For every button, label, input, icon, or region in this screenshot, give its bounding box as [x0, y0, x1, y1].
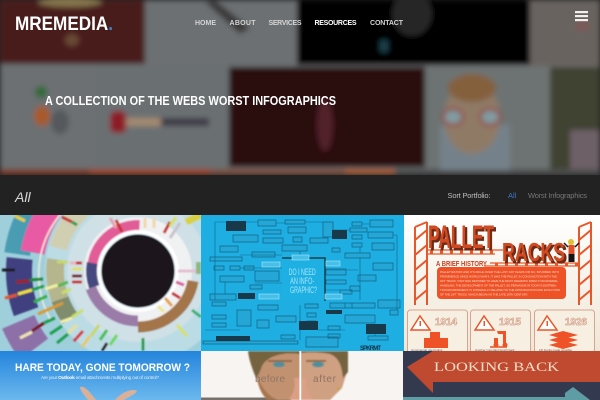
navigation menu — [195, 20, 404, 27]
card: 1914: Commercial use begins — [411, 348, 443, 352]
tile: pallet racks — [402, 215, 600, 352]
history text box: PROMINENCE SINCE WORLD WAR II. IT WAS THE PALLET, IN CONJUNCTION WITH THE — [440, 274, 557, 278]
tile: before and after face — [201, 351, 403, 400]
label boxes around centre — [259, 255, 342, 299]
history text box: HANDLING. THE DEVELOPMENT OF THE PALLET, SO PERVASIVE IN TODAY'S DISTRIBU- — [440, 284, 557, 288]
history text box — [437, 267, 566, 299]
title shadow: pallet: PALLET — [430, 221, 496, 257]
central question box: GRAPHIC? — [290, 285, 317, 296]
title: racks: RACKS — [502, 237, 565, 267]
filter bar — [0, 175, 600, 215]
radial tick marks — [2, 215, 201, 351]
card: 1914 — [408, 310, 468, 352]
subtitle: A BRIEF HISTORY — [436, 261, 487, 268]
rack platforms — [427, 250, 579, 266]
logo: MREMEDIA. — [15, 13, 113, 35]
history text box: PALLETIZATION AND ITS ROLE OVER THE LAST 100 YEARS OR SO, SPURRED INTO — [440, 270, 560, 274]
left rack — [415, 222, 427, 305]
history text box: OF THE LIFT TRUCK, WHICH BEGAN IN THE LATE 19TH CENTURY. — [440, 292, 528, 296]
central question box — [282, 258, 325, 301]
card: 1915: Another important benchmark — [475, 348, 515, 352]
divider — [300, 351, 301, 400]
tile: circular data wheel — [0, 215, 201, 351]
hare headline: HARE TODAY, GONE TOMORROW ? — [15, 362, 190, 374]
icon: rabbit ears — [80, 387, 137, 400]
history text box: TION ENVIRONMENT, IS INTEGRALLY RELATED TO THE INTRODUCTION AND EVOLUTION — [440, 288, 560, 292]
teal arrow — [403, 387, 590, 400]
title: pallet: PALLET — [428, 219, 494, 255]
tile: looking back — [403, 351, 600, 400]
card: 1915: 1915 — [499, 317, 521, 328]
central question box: AN INFO- — [290, 276, 314, 287]
red arrow — [407, 351, 600, 393]
flowchart connector lines — [205, 222, 397, 340]
nav: services: SERVICES — [268, 20, 302, 27]
nav: resources: RESOURCES — [314, 20, 357, 27]
card: 1926: 1926 — [565, 317, 587, 328]
icon: hamburger menu — [575, 11, 588, 21]
nav: about: ABOUT — [230, 20, 256, 27]
nav: home: HOME — [195, 20, 216, 27]
card: 1914: 1914 — [435, 317, 457, 328]
inner rings — [76, 209, 200, 333]
card: 1926 — [534, 310, 594, 352]
sort option: worst infographics: Worst Infographics — [528, 191, 587, 200]
label: before: before — [255, 374, 285, 385]
flowchart boxes — [203, 220, 400, 347]
portrait: after side — [301, 351, 348, 400]
caption strip — [201, 398, 291, 400]
label: after: after — [313, 374, 337, 385]
portrait: before side — [248, 351, 300, 400]
title shadow: racks: RACKS — [504, 239, 567, 269]
hero: blurred image collage — [0, 0, 600, 175]
black highlighted boxes — [216, 221, 386, 341]
sort option: all: All — [508, 191, 517, 200]
nav: contact: CONTACT — [370, 20, 404, 27]
sort label: Sort Portfolio: — [448, 191, 490, 200]
central black disc — [102, 234, 174, 308]
category title: All — [14, 189, 31, 205]
central question box: DO I NEED — [289, 267, 316, 278]
history text box: LIFT TRUCK, THAT WAS DESTINED TO HAVE THE MOST DRAMATIC IMPACT ON MATERIAL — [440, 279, 558, 283]
card: 1926: Lift trucks made possible — [539, 348, 572, 352]
right rack — [579, 222, 591, 305]
card: 1915 — [470, 310, 530, 352]
hero heading: A COLLECTION OF THE WEBS WORST INFOGRAPHICS — [45, 94, 336, 108]
tile: flowchart — [201, 215, 402, 352]
hare subheading: Are your Outlook email attachments multiplying out of control? — [41, 375, 159, 381]
worker figure — [564, 239, 579, 262]
outer data rings — [2, 215, 201, 351]
tile: hare today — [0, 351, 201, 400]
looking back heading: LOOKING BACK — [434, 359, 560, 374]
brand mark: SPKRMT — [360, 346, 381, 352]
